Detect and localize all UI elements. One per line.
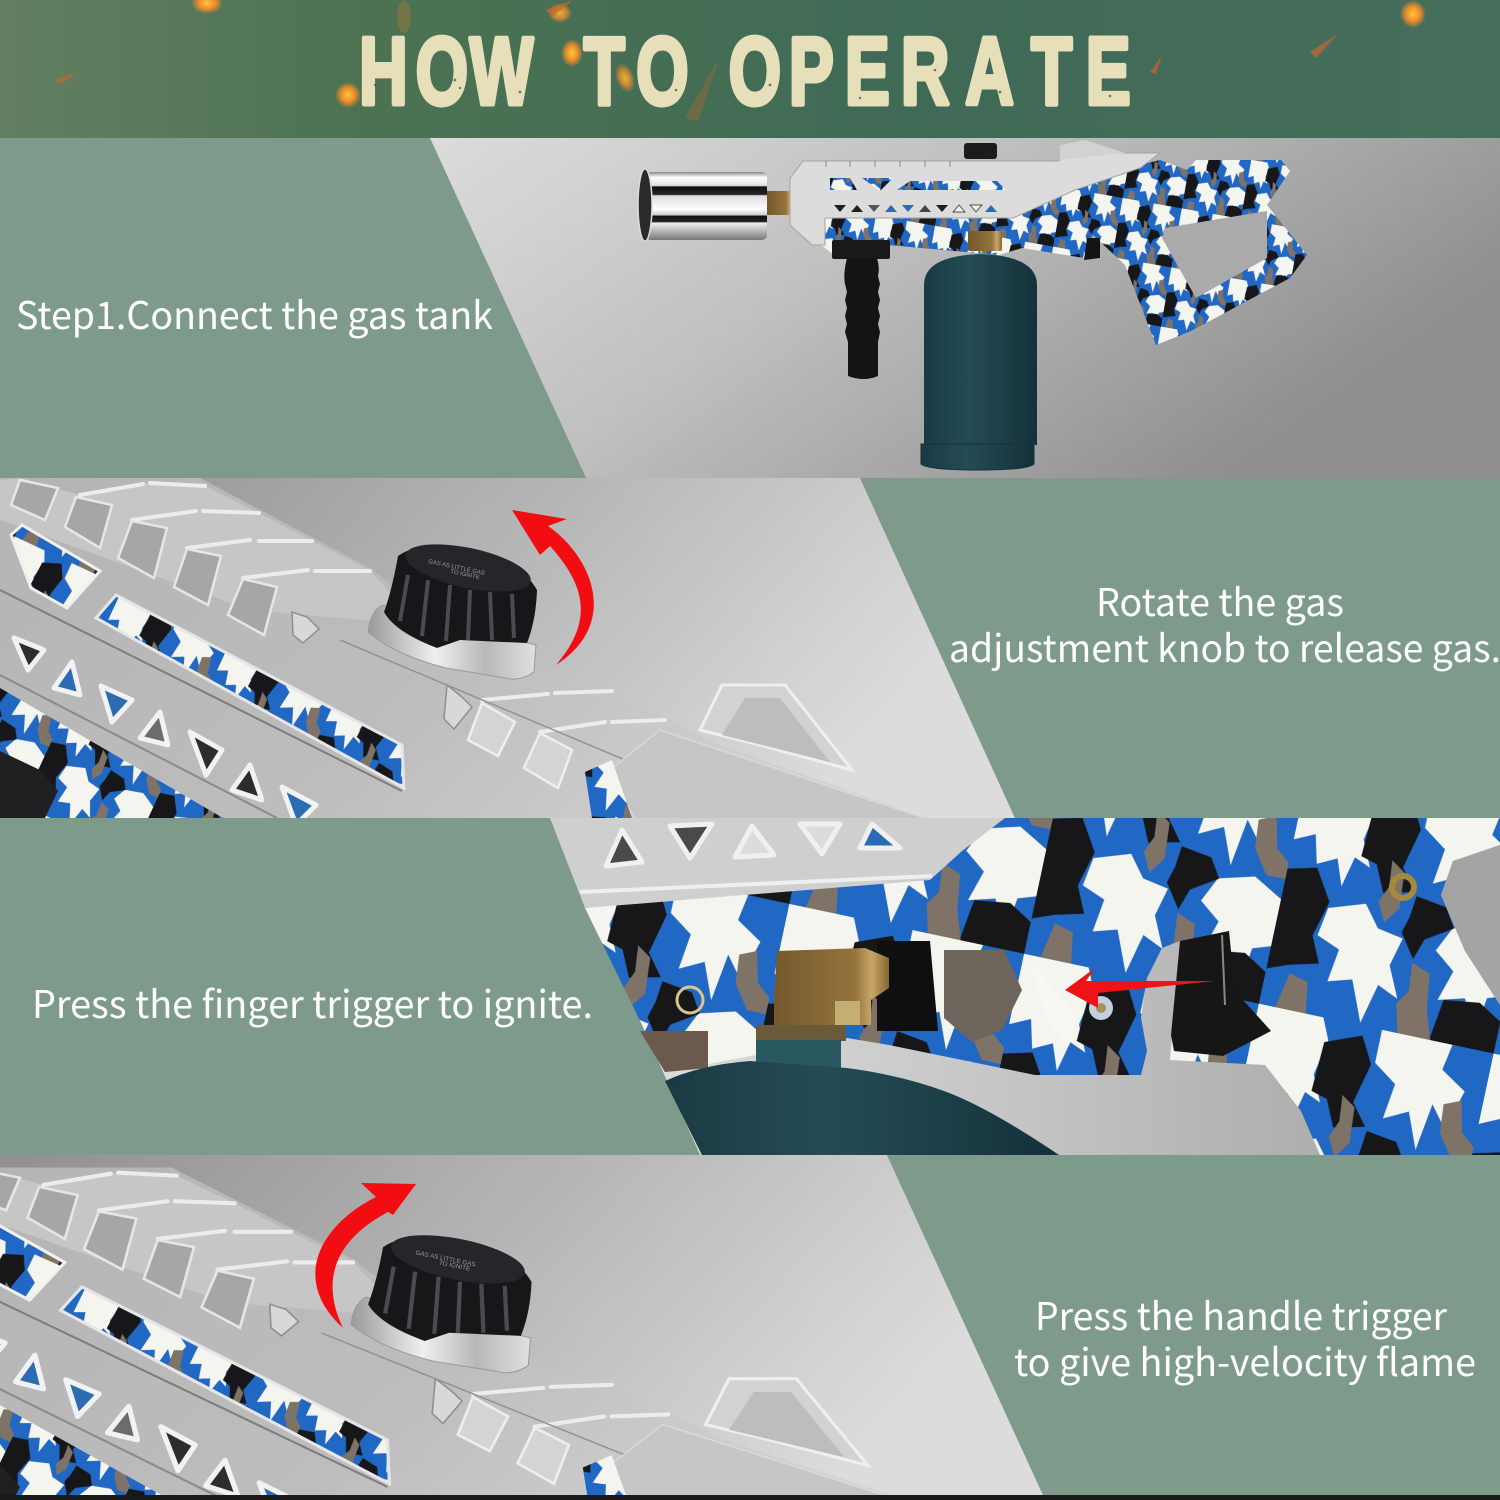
text: step 2: Rotate the gas [1096, 572, 1344, 627]
text: step 4: Press the handle trigger [1035, 1286, 1447, 1341]
panel: step 1 photo [430, 138, 1500, 478]
header banner [0, 0, 1500, 138]
panel: step 2 photo [0, 478, 1015, 830]
panel: step 4 photo [0, 1155, 1043, 1500]
arrow: rotate knob [512, 510, 594, 665]
text: step 4: to give high-velocity flame [1014, 1332, 1476, 1387]
icon: camo handle close-up [550, 818, 1500, 1155]
text: step 2 [949, 572, 1500, 673]
text: step 4 [1014, 1286, 1476, 1387]
text: step 1: Step1.Connect the gas tank [16, 285, 493, 340]
text: step 2: adjustment knob to release gas. [949, 618, 1500, 673]
text: step 3: Press the finger trigger to ignite. [32, 974, 593, 1029]
panel: step 3 photo [550, 818, 1500, 1155]
arrow: handle trigger [315, 1183, 416, 1328]
title: HOW TO OPERATE [359, 17, 1131, 125]
icon: flamethrower with gas tank [638, 140, 1307, 470]
arrow: press finger trigger [1065, 968, 1215, 1008]
